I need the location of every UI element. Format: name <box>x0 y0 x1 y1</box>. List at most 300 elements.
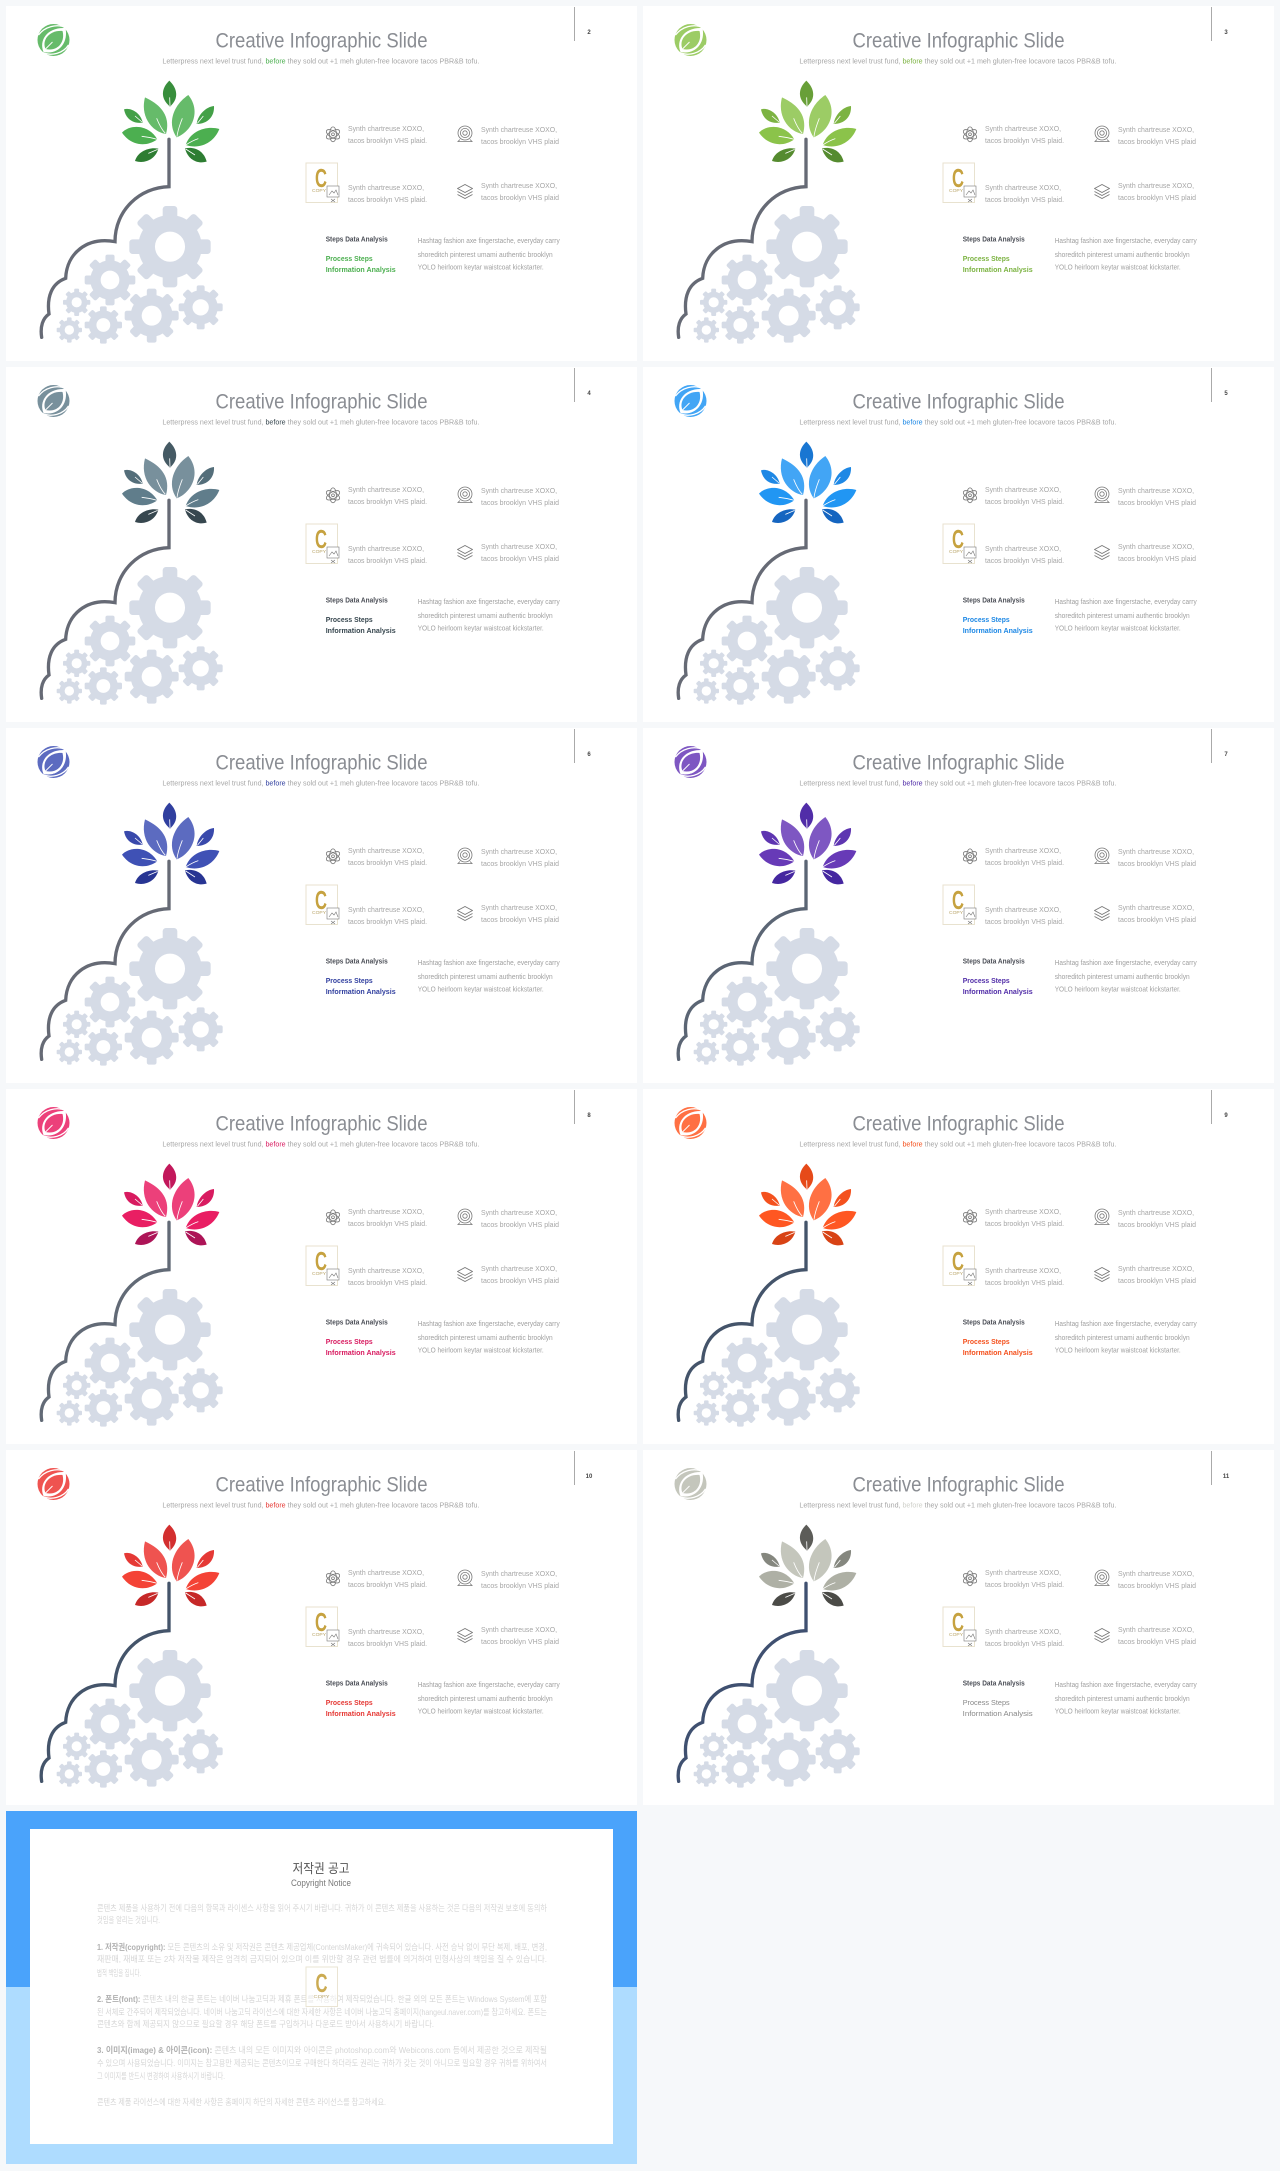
thumbnail badge: COPY <box>312 549 326 554</box>
feature: layers <box>458 1625 559 1646</box>
steps labels: Process Steps <box>963 254 1010 263</box>
feature: atom: tacos brooklyn VHS plaid. <box>348 858 427 867</box>
feature: third text: Synth chartreuse XOXO, <box>985 544 1061 553</box>
thumbnail badge: C <box>952 885 964 915</box>
thumbnail badge: COPY <box>949 910 963 915</box>
subtitle: Letterpress next level trust fund, before they sold out +1 meh gluten-free locavore tacos PBR&B tofu. <box>799 780 1116 787</box>
description paragraph: Hashtag fashion axe fingerstache, everyday carry <box>1055 599 1197 606</box>
steps labels: Process Steps <box>963 1337 1010 1346</box>
steps labels: Process Steps <box>326 254 373 263</box>
font section: 2. 폰트(font): 콘텐츠 내의 한글 폰트는 네이버 나눔고딕과 제휴 폰트를 사용하여 제작되었습니다. 한글 외의 모든 폰트는 Windows System에 포함 <box>97 1994 547 2004</box>
thumbnail badge: C <box>952 1607 964 1637</box>
slide card <box>643 1450 1274 1805</box>
description paragraph <box>418 599 560 632</box>
feature: atom: Synth chartreuse XOXO, <box>348 485 424 494</box>
slide title: Creative Infographic Slide <box>216 751 428 775</box>
feature: atom: tacos brooklyn VHS plaid. <box>348 497 427 506</box>
feature: target: tacos brooklyn VHS plaid <box>481 498 559 507</box>
feature: target: Synth chartreuse XOXO, <box>481 486 557 495</box>
description paragraph: shoreditch pinterest umami authentic brooklyn <box>418 613 553 620</box>
thumbnail badge: COPY <box>949 549 963 554</box>
feature: third text: tacos brooklyn VHS plaid. <box>348 1639 427 1648</box>
feature: atom: Synth chartreuse XOXO, <box>985 846 1061 855</box>
feature: target <box>458 1208 559 1229</box>
feature: target <box>1095 486 1196 507</box>
feature: target: Synth chartreuse XOXO, <box>1118 1208 1194 1217</box>
thumbnail badge <box>306 163 339 202</box>
feature: third text: tacos brooklyn VHS plaid. <box>985 1639 1064 1648</box>
feature: target: tacos brooklyn VHS plaid <box>1118 859 1196 868</box>
thumbnail badge: COPY <box>949 1271 963 1276</box>
feature: atom <box>962 1568 1064 1589</box>
blue frame top <box>6 1811 637 1987</box>
feature: third text: tacos brooklyn VHS plaid. <box>985 917 1064 926</box>
slide title: Creative Infographic Slide <box>852 390 1064 414</box>
description paragraph <box>418 1321 560 1354</box>
feature: third text: Synth chartreuse XOXO, <box>348 1627 424 1636</box>
logo icon <box>674 746 706 778</box>
description paragraph <box>1055 238 1197 271</box>
intro paragraph: 콘텐츠 제품을 사용하기 전에 다음의 항목과 라이센스 사항을 읽어 주시기 바랍니다. 귀하가 이 콘텐츠 제품을 사용하는 것은 다음의 저작권 보호에 동의하 <box>97 1903 547 1913</box>
steps labels <box>963 957 1033 996</box>
logo icon <box>674 1468 706 1500</box>
feature: third text: tacos brooklyn VHS plaid. <box>348 917 427 926</box>
feature: target: Synth chartreuse XOXO, <box>1118 486 1194 495</box>
feature: third text <box>985 1627 1064 1648</box>
slide card <box>6 1089 637 1444</box>
feature: atom: tacos brooklyn VHS plaid. <box>348 136 427 145</box>
tree and gears illustration <box>678 1164 860 1427</box>
tree and gears illustration <box>41 1525 223 1788</box>
description paragraph: YOLO heirloom keytar waistcoat kickstarter. <box>1055 625 1181 632</box>
description paragraph: Hashtag fashion axe fingerstache, everyday carry <box>1055 1682 1197 1689</box>
steps labels <box>326 957 396 996</box>
slide 5: blue <box>643 367 1274 722</box>
thumbnail badge <box>943 163 976 202</box>
subtitle: Letterpress next level trust fund, before they sold out +1 meh gluten-free locavore tacos PBR&B tofu. <box>799 58 1116 65</box>
feature: atom: Synth chartreuse XOXO, <box>348 1207 424 1216</box>
slide card <box>643 6 1274 361</box>
feature: atom: tacos brooklyn VHS plaid. <box>985 858 1064 867</box>
feature: atom: tacos brooklyn VHS plaid. <box>985 1580 1064 1589</box>
feature: target: tacos brooklyn VHS plaid <box>481 1220 559 1229</box>
feature: layers <box>1094 1625 1196 1646</box>
slide 6: indigo <box>6 728 637 1083</box>
description paragraph: Hashtag fashion axe fingerstache, everyday carry <box>418 1682 560 1689</box>
description paragraph: Hashtag fashion axe fingerstache, everyday carry <box>418 238 560 245</box>
feature: target <box>458 486 559 507</box>
slide card <box>6 728 637 1083</box>
description paragraph <box>1055 960 1197 993</box>
subtitle: Letterpress next level trust fund, before they sold out +1 meh gluten-free locavore tacos PBR&B tofu. <box>162 419 479 426</box>
steps labels <box>963 1318 1033 1357</box>
feature: third text: tacos brooklyn VHS plaid. <box>348 1278 427 1287</box>
feature: third text: Synth chartreuse XOXO, <box>348 905 424 914</box>
feature: target <box>1095 1208 1196 1229</box>
description paragraph: shoreditch pinterest umami authentic brooklyn <box>418 252 553 259</box>
page number tab: 4 <box>587 391 591 397</box>
steps labels: Process Steps <box>326 1337 373 1346</box>
tree and gears illustration <box>678 442 860 705</box>
feature: target <box>458 1569 559 1590</box>
steps labels: Information Analysis <box>963 1709 1033 1718</box>
feature: third text: Synth chartreuse XOXO, <box>348 183 424 192</box>
feature: atom: tacos brooklyn VHS plaid. <box>985 136 1064 145</box>
page number tab: 3 <box>1224 30 1228 36</box>
feature: layers <box>1094 1264 1196 1285</box>
logo icon <box>38 746 70 778</box>
feature: target: Synth chartreuse XOXO, <box>1118 125 1194 134</box>
slide card <box>6 1450 637 1805</box>
steps labels <box>963 235 1033 274</box>
page number tab: 11 <box>1223 1474 1230 1480</box>
slide 8: pink <box>6 1089 637 1444</box>
tree and gears illustration <box>678 1525 860 1788</box>
feature: layers <box>458 181 559 202</box>
steps labels: Steps Data Analysis <box>326 1679 388 1688</box>
empty grey cell <box>643 1811 1274 2165</box>
thumbnail badge <box>306 1246 339 1286</box>
feature: third text: tacos brooklyn VHS plaid. <box>985 1278 1064 1287</box>
logo icon <box>38 24 70 56</box>
page number tab <box>1211 1451 1230 1485</box>
steps labels <box>326 235 396 274</box>
thumbnail badge: COPY <box>312 188 326 193</box>
feature: third text <box>348 1627 427 1648</box>
tree and gears illustration <box>41 442 223 705</box>
feature: layers: Synth chartreuse XOXO, <box>481 1625 557 1634</box>
description paragraph: YOLO heirloom keytar waistcoat kickstarter. <box>418 1708 544 1715</box>
tree and gears illustration <box>678 803 860 1066</box>
feature: layers: tacos brooklyn VHS plaid <box>481 1276 559 1285</box>
feature: target: Synth chartreuse XOXO, <box>481 125 557 134</box>
thumbnail badge: COPY <box>949 188 963 193</box>
steps labels: Information Analysis <box>326 987 396 996</box>
description paragraph: YOLO heirloom keytar waistcoat kickstarter. <box>418 1347 544 1354</box>
logo icon <box>38 1468 70 1500</box>
feature: target: tacos brooklyn VHS plaid <box>481 859 559 868</box>
thumbnail badge <box>306 524 339 564</box>
feature: layers: Synth chartreuse XOXO, <box>1118 542 1194 551</box>
feature: third text: tacos brooklyn VHS plaid. <box>348 195 427 204</box>
feature: layers: tacos brooklyn VHS plaid <box>481 1637 559 1646</box>
subtitle: Letterpress next level trust fund, before they sold out +1 meh gluten-free locavore tacos PBR&B tofu. <box>162 1502 479 1509</box>
slide card <box>6 6 637 361</box>
description paragraph: YOLO heirloom keytar waistcoat kickstarter. <box>1055 1708 1181 1715</box>
feature: layers: tacos brooklyn VHS plaid <box>1118 193 1196 202</box>
description paragraph <box>418 238 560 271</box>
intro paragraph: 것임을 알리는 것입니다. <box>97 1915 160 1925</box>
copyright section: 재판매, 재배포 또는 2차 저작물 제작은 엄격히 금지되어 있으며 이를 위반할 경우 관련 법률에 의거하여 민형사상의 책임을 질 수 있습니다. <box>97 1954 547 1964</box>
feature: layers <box>458 542 559 563</box>
feature: atom: tacos brooklyn VHS plaid. <box>348 1580 427 1589</box>
description paragraph: Hashtag fashion axe fingerstache, everyday carry <box>418 599 560 606</box>
feature: atom <box>962 846 1064 867</box>
notice subtitle: Copyright Notice <box>291 1878 351 1888</box>
feature: atom: Synth chartreuse XOXO, <box>348 1568 424 1577</box>
slide title: Creative Infographic Slide <box>216 1112 428 1136</box>
feature: layers: Synth chartreuse XOXO, <box>1118 1625 1194 1634</box>
feature: third text <box>985 183 1064 204</box>
feature: target <box>1095 1569 1196 1590</box>
white notice card <box>30 1829 613 2144</box>
feature: atom <box>325 485 427 506</box>
feature: layers: Synth chartreuse XOXO, <box>481 903 557 912</box>
slide 10: red <box>6 1450 637 1805</box>
steps labels: Steps Data Analysis <box>326 596 388 605</box>
feature: third text: tacos brooklyn VHS plaid. <box>985 556 1064 565</box>
steps labels <box>326 596 396 635</box>
feature: atom: Synth chartreuse XOXO, <box>348 846 424 855</box>
feature: third text: tacos brooklyn VHS plaid. <box>348 556 427 565</box>
thumbnail badge: COPY <box>949 1632 963 1637</box>
feature: third text <box>985 1266 1064 1287</box>
page number tab <box>574 1090 591 1124</box>
description paragraph: Hashtag fashion axe fingerstache, everyday carry <box>418 1321 560 1328</box>
thumbnail badge <box>943 1607 976 1646</box>
feature: third text: Synth chartreuse XOXO, <box>985 905 1061 914</box>
feature: target: Synth chartreuse XOXO, <box>481 847 557 856</box>
feature: atom: Synth chartreuse XOXO, <box>985 1568 1061 1577</box>
description paragraph: YOLO heirloom keytar waistcoat kickstarter. <box>418 986 544 993</box>
description paragraph: shoreditch pinterest umami authentic brooklyn <box>418 1335 553 1342</box>
page number tab <box>574 1451 593 1485</box>
page number tab: 7 <box>1224 752 1228 758</box>
description paragraph: Hashtag fashion axe fingerstache, everyday carry <box>1055 238 1197 245</box>
logo icon <box>674 385 706 417</box>
description paragraph: shoreditch pinterest umami authentic brooklyn <box>1055 974 1190 981</box>
image and icon section <box>97 2045 547 2081</box>
description paragraph <box>1055 1321 1197 1354</box>
feature: third text: Synth chartreuse XOXO, <box>348 544 424 553</box>
subtitle: Letterpress next level trust fund, before they sold out +1 meh gluten-free locavore tacos PBR&B tofu. <box>799 1502 1116 1509</box>
feature: atom <box>962 1207 1064 1228</box>
slide title: Creative Infographic Slide <box>852 1473 1064 1497</box>
slide title: Creative Infographic Slide <box>852 1112 1064 1136</box>
watermark badge <box>306 1967 338 2006</box>
description paragraph: shoreditch pinterest umami authentic brooklyn <box>1055 1335 1190 1342</box>
copyright section: 1. 저작권(copyright): 모든 콘텐츠의 소유 및 저작권은 콘텐츠 제공업체(ContentsMaker)에 귀속되어 있습니다. 사전 승낙 없이 무단 복제, 배포, 변경, <box>97 1942 547 1952</box>
steps labels: Steps Data Analysis <box>326 1318 388 1327</box>
tree and gears illustration <box>41 803 223 1066</box>
slide 11: neutral grey <box>643 1450 1274 1805</box>
feature: atom <box>325 1207 427 1228</box>
steps labels: Information Analysis <box>963 987 1033 996</box>
feature: target: tacos brooklyn VHS plaid <box>1118 1220 1196 1229</box>
description paragraph: Hashtag fashion axe fingerstache, everyday carry <box>1055 1321 1197 1328</box>
slide card <box>643 367 1274 722</box>
steps labels: Process Steps <box>963 1698 1010 1707</box>
feature: atom: tacos brooklyn VHS plaid. <box>985 497 1064 506</box>
feature: third text <box>348 1266 427 1287</box>
feature: atom <box>962 124 1064 145</box>
slide card <box>6 367 637 722</box>
feature: target: tacos brooklyn VHS plaid <box>481 137 559 146</box>
description paragraph <box>418 1682 560 1715</box>
feature: layers <box>1094 181 1196 202</box>
page number tab: 2 <box>587 30 591 36</box>
feature: atom <box>962 485 1064 506</box>
feature: layers: tacos brooklyn VHS plaid <box>1118 1637 1196 1646</box>
feature: third text: tacos brooklyn VHS plaid. <box>985 195 1064 204</box>
feature: layers: tacos brooklyn VHS plaid <box>481 193 559 202</box>
steps labels: Information Analysis <box>963 265 1033 274</box>
page number tab: 6 <box>587 752 591 758</box>
page number tab: 5 <box>1224 391 1228 397</box>
feature: layers: tacos brooklyn VHS plaid <box>481 915 559 924</box>
feature: atom: tacos brooklyn VHS plaid. <box>985 1219 1064 1228</box>
image and icon section: 그 이미지를 반드시 변경하여 사용하시기 바랍니다. <box>97 2071 225 2081</box>
feature: layers: tacos brooklyn VHS plaid <box>1118 554 1196 563</box>
steps labels: Information Analysis <box>326 1348 396 1357</box>
thumbnail badge <box>943 524 976 564</box>
steps labels: Steps Data Analysis <box>326 235 388 244</box>
logo icon <box>38 1107 70 1139</box>
page number tab <box>574 7 591 41</box>
feature: atom: tacos brooklyn VHS plaid. <box>348 1219 427 1228</box>
feature: layers: Synth chartreuse XOXO, <box>481 181 557 190</box>
page number tab <box>1211 1090 1228 1124</box>
feature: atom: Synth chartreuse XOXO, <box>985 485 1061 494</box>
page number tab <box>574 368 591 402</box>
feature: atom <box>325 1568 427 1589</box>
feature: layers <box>1094 542 1196 563</box>
feature: atom: Synth chartreuse XOXO, <box>348 124 424 133</box>
feature: target: Synth chartreuse XOXO, <box>481 1208 557 1217</box>
slide 3: light green <box>643 6 1274 361</box>
thumbnail badge: C <box>952 1246 964 1276</box>
logo icon <box>38 385 70 417</box>
steps labels <box>326 1679 396 1718</box>
feature: target: Synth chartreuse XOXO, <box>481 1569 557 1578</box>
tree and gears illustration <box>41 1164 223 1427</box>
feature: atom: Synth chartreuse XOXO, <box>985 124 1061 133</box>
thumbnail badge: C <box>315 524 327 554</box>
copyright section <box>97 1942 547 1978</box>
steps labels: Information Analysis <box>326 1709 396 1718</box>
description paragraph: Hashtag fashion axe fingerstache, everyday carry <box>1055 960 1197 967</box>
slide 4: blue grey <box>6 367 637 722</box>
subtitle: Letterpress next level trust fund, before they sold out +1 meh gluten-free locavore tacos PBR&B tofu. <box>799 419 1116 426</box>
thumbnail badge: C <box>952 524 964 554</box>
description paragraph: shoreditch pinterest umami authentic brooklyn <box>1055 1696 1190 1703</box>
feature: third text <box>985 905 1064 926</box>
description paragraph: YOLO heirloom keytar waistcoat kickstarter. <box>1055 986 1181 993</box>
description paragraph: YOLO heirloom keytar waistcoat kickstarter. <box>418 264 544 271</box>
feature: layers: Synth chartreuse XOXO, <box>1118 1264 1194 1273</box>
steps labels: Information Analysis <box>326 265 396 274</box>
slide 2: green <box>6 6 637 361</box>
feature: third text <box>348 183 427 204</box>
panel: copyright notice <box>6 1811 637 2164</box>
tree and gears illustration <box>678 81 860 344</box>
subtitle: Letterpress next level trust fund, before they sold out +1 meh gluten-free locavore tacos PBR&B tofu. <box>799 1141 1116 1148</box>
description paragraph: shoreditch pinterest umami authentic brooklyn <box>1055 252 1190 259</box>
thumbnail badge: COPY <box>312 1632 326 1637</box>
description paragraph: shoreditch pinterest umami authentic brooklyn <box>1055 613 1190 620</box>
font section: 된 서체로 간주되어 제작되었습니다. 네이버 나눔고딕 라이선스에 대한 자세한 사항은 네이버 나눔고딕 홈페이지(hangeul.naver.com)를 참고하세요. 폰트는 <box>97 2007 547 2017</box>
page number tab: 10 <box>586 1474 593 1480</box>
steps labels: Steps Data Analysis <box>963 1679 1025 1688</box>
image and icon section: 3. 이미지(image) & 아이콘(icon): 콘텐츠 내의 모든 이미지와 아이콘은 photoshop.com와 Webicons.com 등에서 제공한 것으로 제작될 <box>97 2045 547 2055</box>
description paragraph: YOLO heirloom keytar waistcoat kickstarter. <box>1055 1347 1181 1354</box>
description paragraph: shoreditch pinterest umami authentic brooklyn <box>418 1696 553 1703</box>
thumbnail badge: C <box>315 163 327 193</box>
slide 9: orange <box>643 1089 1274 1444</box>
steps labels: Process Steps <box>326 615 373 624</box>
steps labels: Process Steps <box>963 976 1010 985</box>
light blue frame bottom <box>6 1987 637 2164</box>
steps labels: Steps Data Analysis <box>963 1318 1025 1327</box>
slide title: Creative Infographic Slide <box>216 29 428 53</box>
watermark badge: COPY <box>314 1994 330 1999</box>
feature: layers <box>1094 903 1196 924</box>
feature: target: Synth chartreuse XOXO, <box>1118 847 1194 856</box>
intro paragraph <box>97 1903 547 1925</box>
thumbnail badge <box>943 885 976 924</box>
font section: 콘텐츠와 함께 제공되지 않으므로 필요할 경우 해당 폰트를 구입하거나 다운로드 받아서 사용하시기 바랍니다. <box>97 2019 434 2029</box>
thumbnail badge: COPY <box>312 1271 326 1276</box>
subtitle: Letterpress next level trust fund, before they sold out +1 meh gluten-free locavore tacos PBR&B tofu. <box>162 780 479 787</box>
feature: layers: Synth chartreuse XOXO, <box>481 1264 557 1273</box>
feature: layers <box>458 903 559 924</box>
logo icon <box>674 1107 706 1139</box>
slide title: Creative Infographic Slide <box>852 751 1064 775</box>
steps labels: Steps Data Analysis <box>326 957 388 966</box>
slide title: Creative Infographic Slide <box>216 1473 428 1497</box>
feature: third text: Synth chartreuse XOXO, <box>985 1266 1061 1275</box>
feature: layers: tacos brooklyn VHS plaid <box>481 554 559 563</box>
page number tab: 9 <box>1224 1113 1228 1119</box>
image and icon section: 수 있으며 사용되었습니다. 이미지는 참고용만 제공되는 콘텐츠이므로 구매한다 하더라도 권리는 귀하가 갖는 것이 아니므로 필요할 경우 귀하를 위하여서 <box>97 2058 547 2068</box>
slide 7: purple <box>643 728 1274 1083</box>
licence footnote: 콘텐츠 제품 라이선스에 대한 자세한 사항은 홈페이지 하단의 자세한 콘텐츠 라이선스를 참고하세요. <box>97 2097 386 2107</box>
steps labels: Process Steps <box>963 615 1010 624</box>
steps labels: Information Analysis <box>326 626 396 635</box>
page number tab <box>1211 368 1228 402</box>
steps labels: Steps Data Analysis <box>963 957 1025 966</box>
steps labels <box>326 1318 396 1357</box>
feature: target <box>1095 847 1196 868</box>
thumbnail badge <box>306 885 339 924</box>
feature: layers <box>458 1264 559 1285</box>
steps labels: Steps Data Analysis <box>963 596 1025 605</box>
feature: third text <box>348 905 427 926</box>
feature: atom <box>325 846 427 867</box>
feature: layers: Synth chartreuse XOXO, <box>1118 903 1194 912</box>
tree and gears illustration <box>41 81 223 344</box>
feature: third text: Synth chartreuse XOXO, <box>985 1627 1061 1636</box>
subtitle: Letterpress next level trust fund, before they sold out +1 meh gluten-free locavore tacos PBR&B tofu. <box>162 1141 479 1148</box>
thumbnail badge <box>306 1607 339 1646</box>
feature: target <box>1095 125 1196 146</box>
logo icon <box>674 24 706 56</box>
description paragraph <box>1055 1682 1197 1715</box>
steps labels: Information Analysis <box>963 626 1033 635</box>
steps labels: Steps Data Analysis <box>963 235 1025 244</box>
feature: target: Synth chartreuse XOXO, <box>1118 1569 1194 1578</box>
feature: target: tacos brooklyn VHS plaid <box>1118 1581 1196 1590</box>
steps labels <box>963 596 1033 635</box>
feature: layers: Synth chartreuse XOXO, <box>1118 181 1194 190</box>
steps labels: Information Analysis <box>963 1348 1033 1357</box>
feature: third text: Synth chartreuse XOXO, <box>985 183 1061 192</box>
feature: third text <box>985 544 1064 565</box>
feature: third text: Synth chartreuse XOXO, <box>348 1266 424 1275</box>
page number tab <box>1211 7 1228 41</box>
feature: target <box>458 847 559 868</box>
description paragraph: Hashtag fashion axe fingerstache, everyday carry <box>418 960 560 967</box>
